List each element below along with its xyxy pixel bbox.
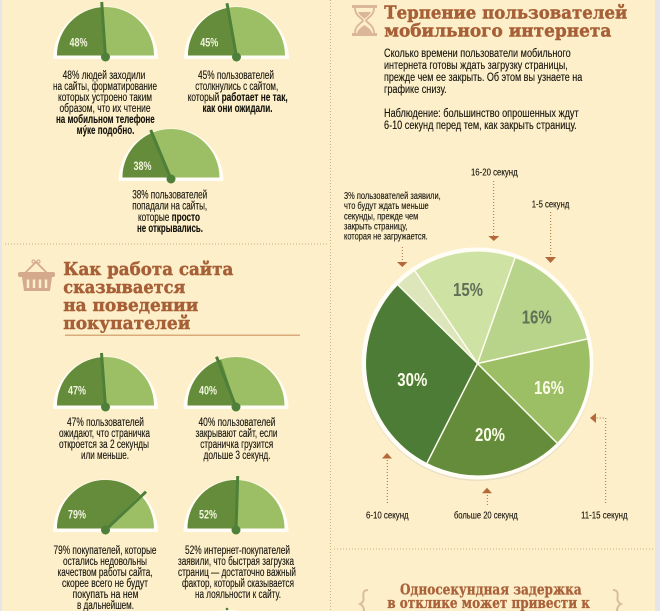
text: 40% caption: 40% пользователей [198, 417, 276, 429]
label: 3% note with arrow: закрыть страницу, [344, 222, 407, 232]
text: 79% caption: качеством работы сайта, [58, 567, 152, 579]
label: over 20 seconds with arrow [454, 488, 518, 522]
text: 52% caption [178, 545, 296, 601]
text: 52% caption: фактор, который сказывается [182, 578, 294, 590]
text: 79% caption: 79% покупателей, которые [54, 545, 156, 557]
text: intro: 6-10 секунд перед тем, как закрыть страницу. [384, 120, 577, 132]
text: 40% caption [196, 417, 278, 462]
text: intro: интернета готовы ждать загрузку страницы, [384, 60, 568, 72]
pie chart: 15% [453, 279, 483, 300]
text: 45% caption [188, 70, 288, 115]
text: 45% caption: который работает не так, [188, 92, 288, 104]
text: 48% caption: 48% людей заходили [63, 70, 145, 82]
text: 52% caption: заявили, что быстрая загрузка [178, 556, 294, 568]
label: 16-20 seconds with arrow: 16-20 секунд [471, 168, 518, 178]
text: 48% caption [53, 70, 157, 137]
pie chart: 30% [397, 369, 427, 390]
text: 79% caption: остались недовольны [63, 556, 147, 568]
text: 79% caption: скорее всего не будут [62, 578, 149, 590]
callout: one second delay [360, 582, 621, 611]
label: 1-5 seconds with arrow [532, 200, 569, 263]
text: 38% caption: 38% пользователей [132, 190, 207, 202]
gauge: 79%: 79% [68, 508, 86, 522]
gauge: 40% [184, 356, 288, 412]
text: intro [384, 48, 583, 132]
heading: patience: Терпение пользователей [384, 2, 627, 24]
text: intro: Наблюдение: большинство опрошенных ждут [384, 108, 579, 120]
label: 6-10 seconds with arrow: 6-10 секунд [366, 510, 409, 522]
heading: shoppers: Как работа сайта [63, 259, 234, 280]
label: 16-20 seconds with arrow [471, 168, 518, 241]
pie chart [362, 248, 594, 481]
pie chart: 16% [522, 306, 552, 328]
heading: patience: мобильного интернета [384, 20, 612, 42]
label: 1-5 seconds with arrow: 1-5 секунд [532, 200, 569, 210]
text: 38% caption: не открывались. [137, 223, 203, 235]
label: 3% note with arrow: которая не загружается. [344, 232, 428, 242]
label: 3% note with arrow: секунды, прежде чем [344, 212, 418, 222]
text: 40% caption: закрывают сайт, если [196, 428, 278, 440]
text: 38% caption: которые просто [138, 212, 200, 224]
text: intro: Сколько времени пользователи мобильного [384, 48, 571, 60]
label: 3% note with arrow: 3% пользователей заявили, [344, 191, 441, 202]
icon: basket [18, 260, 55, 291]
text: intro: прежде чем ее закрыть. Об этом вы узнаете на [384, 72, 583, 84]
text: 52% caption: на лояльности к сайту. [195, 589, 281, 601]
heading: shoppers: сказывается [63, 277, 185, 298]
label: 6-10 seconds with arrow [366, 453, 409, 522]
text: 45% caption: столкнулись с сайтом, [195, 81, 278, 93]
gauge: 47%: 47% [68, 384, 86, 398]
text: 47% caption: или меньше. [81, 450, 129, 462]
text: 48% caption: образом, что их чтение [60, 103, 150, 115]
callout: one second delay: Односекундная задержка [400, 582, 582, 598]
text: 79% caption [54, 545, 156, 611]
text: 48% caption: которых устроено таким [58, 92, 152, 104]
gauge: 47% [53, 353, 158, 412]
icon: hourglass [352, 5, 377, 36]
text: 52% caption: 52% интернет-покупателей [185, 545, 290, 557]
text: intro: графике снизу. [384, 84, 447, 96]
heading: shoppers: на поведении [63, 295, 198, 316]
heading: shoppers: покупателей [63, 313, 190, 334]
gauge: 48% [53, 2, 158, 62]
text: 40% caption: дольше 3 секунд. [204, 450, 270, 462]
heading: patience [384, 2, 627, 42]
gauge: 52%: 52% [199, 508, 217, 522]
gauge: cut off at bottom [220, 608, 240, 611]
gauge: 38%: 38% [134, 159, 152, 173]
text: 38% caption: попадали на сайты, [132, 200, 207, 212]
heading: shoppers [63, 259, 300, 336]
gauge: 52% [184, 476, 288, 534]
text: 48% caption: мýке подобно. [77, 125, 134, 137]
text: 47% caption: 47% пользователей [67, 417, 144, 429]
text: 47% caption: откроется за 2 секунды [59, 439, 149, 451]
text: 47% caption: ожидают, что страничка [59, 428, 150, 440]
label: over 20 seconds with arrow: больше 20 секунд [454, 510, 518, 522]
text: 45% caption: как они ожидали. [202, 103, 272, 115]
text: 48% caption: на мобильном телефоне [56, 114, 155, 126]
gauge: 38% [118, 129, 224, 184]
gauge: 48%: 48% [70, 36, 88, 50]
label: 11-15 seconds with arrow: 11-15 секунд [581, 510, 628, 522]
text: 48% caption: на сайты, форматирование [53, 81, 157, 93]
text: 47% caption [59, 417, 150, 462]
text: 52% caption: страниц — достаточно важный [178, 567, 296, 579]
label: 3% note with arrow [344, 191, 441, 267]
text: 79% caption: покупать на нем [72, 589, 139, 601]
pie chart: 16% [534, 377, 564, 398]
gauge: 45%: 45% [200, 36, 218, 50]
gauge: 79% [53, 480, 158, 534]
label: 3% note with arrow: что будут ждать меньше [344, 200, 429, 212]
pie chart: 20% [475, 424, 505, 445]
text: 40% caption: страничка грузится [200, 439, 273, 451]
label: 11-15 seconds with arrow [581, 413, 628, 522]
gauge: 45% [184, 3, 289, 62]
text: 38% caption [132, 190, 207, 235]
text: 45% caption: 45% пользователей [198, 70, 274, 82]
gauge: 40%: 40% [199, 384, 217, 398]
